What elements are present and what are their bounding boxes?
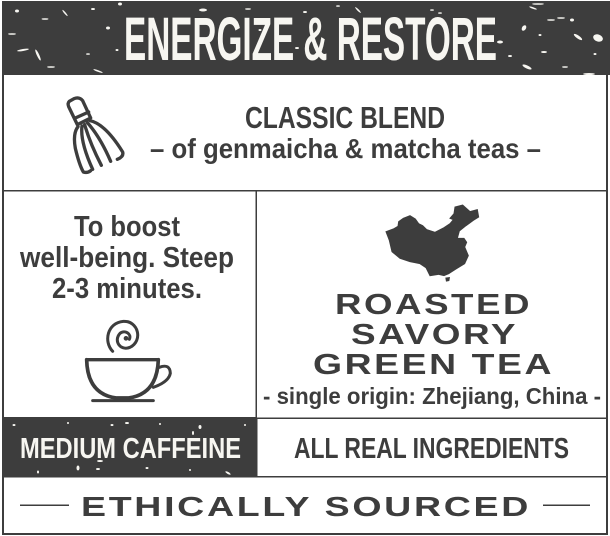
icon: map of China (386, 205, 479, 282)
panel: medium caffeine: MEDIUM CAFFEINE (20, 433, 241, 465)
panel: steep instructions (19, 211, 234, 401)
text: roasted savory green tea: GREEN TEA (313, 349, 554, 381)
heading: classic blend: CLASSIC BLEND (245, 100, 445, 135)
text: roasted savory green tea (313, 289, 554, 381)
icon: steaming tea cup (87, 321, 170, 401)
text: roasted savory green tea: ROASTED (335, 289, 532, 321)
panel: ethically sourced: ETHICALLY SOURCED (81, 491, 531, 522)
text: steep instructions (19, 211, 234, 305)
panel: origin (263, 205, 601, 409)
text: steep instructions: To boost (74, 211, 180, 243)
text: steep instructions: well-being. Steep (19, 242, 234, 274)
text: single origin: - single origin: Zhejiang, China - (263, 383, 601, 409)
panel: classic blend (68, 98, 541, 172)
panel: medium caffeine (2, 417, 257, 477)
icon: matcha whisk (68, 98, 123, 172)
panel: title banner (2, 1, 610, 75)
text: steep instructions: 2-3 minutes. (52, 273, 202, 305)
text: blend description: – of genmaicha & matcha teas – (150, 133, 541, 164)
text: roasted savory green tea: SAVORY (351, 319, 518, 351)
